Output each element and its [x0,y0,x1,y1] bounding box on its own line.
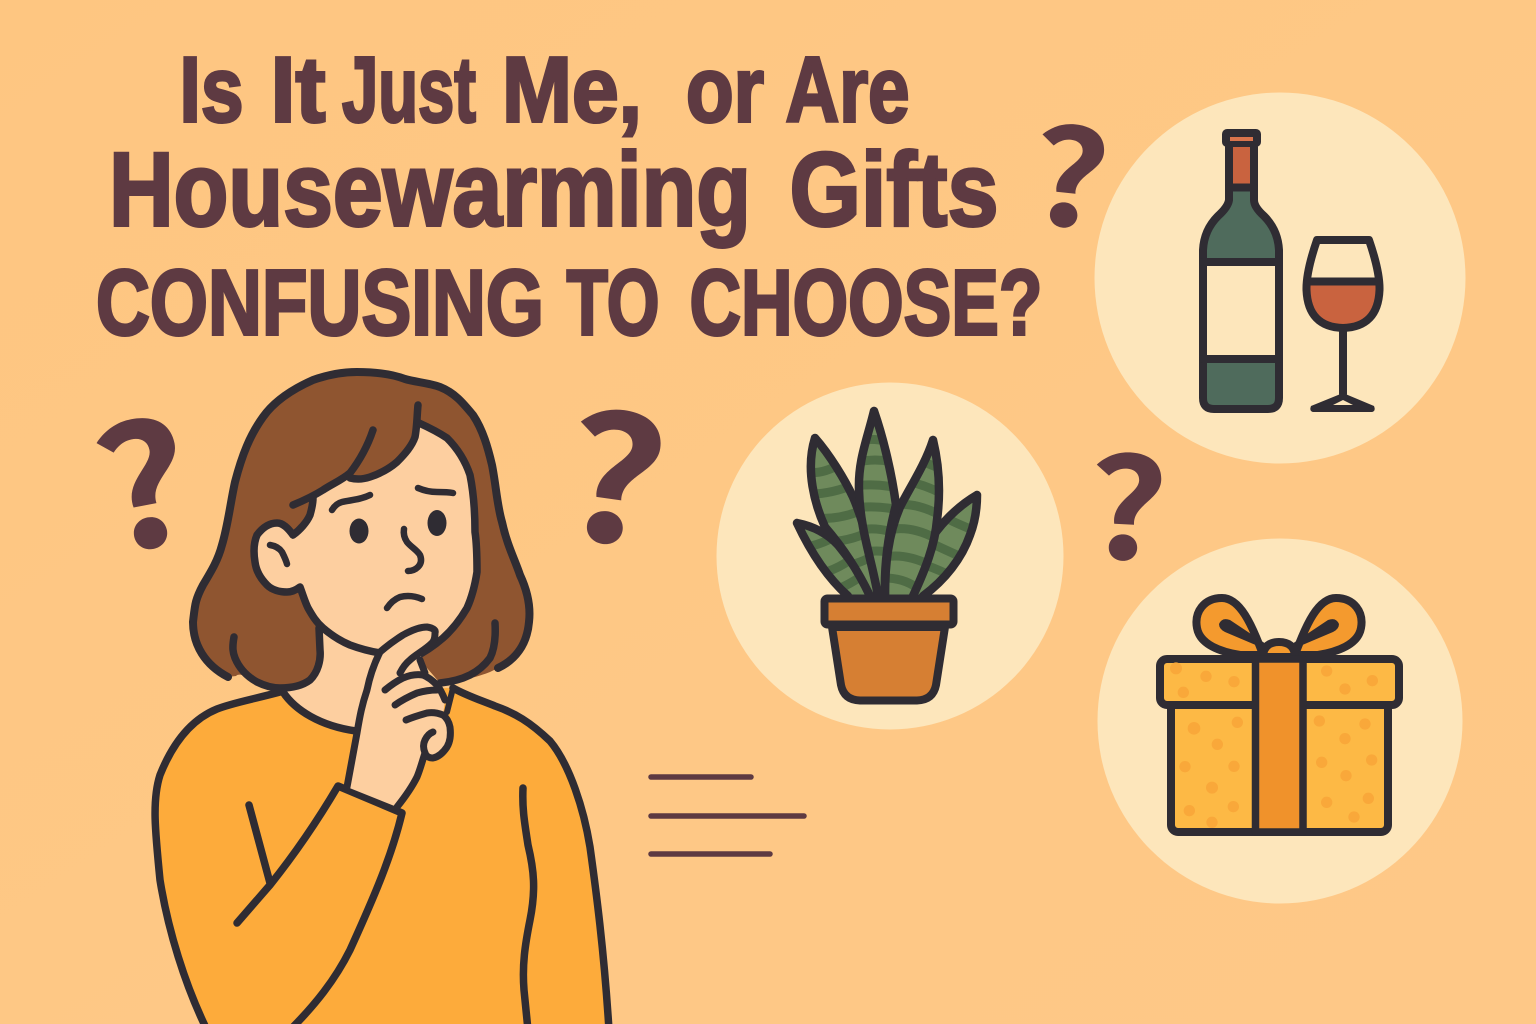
box lid [1160,659,1399,705]
question mark: top right: ? [1022,70,1119,268]
title line 1: It [270,38,326,142]
icon: snake plant [797,411,978,700]
nose [404,529,421,571]
title line 1: Is [180,38,244,142]
title line 3: CHOOSE? [690,250,1042,354]
title [96,38,1042,354]
title line 1: or [686,38,764,142]
bow [1196,598,1362,657]
motion lines [651,777,804,854]
eyebrows [332,488,453,510]
title line 1: Just [342,38,476,142]
question mark: left of person: ? [73,348,211,603]
box body [1171,700,1388,832]
title line 3: CONFUSING [96,250,544,354]
face [254,423,477,658]
ear [254,523,380,653]
title line 3: TO [566,250,660,354]
sweater [155,688,612,1024]
mouth [387,596,422,608]
neck [283,625,385,732]
bangs [293,405,477,658]
panel: plant circle [716,382,1064,730]
hand [347,627,453,807]
eyes [350,510,446,544]
title line 1 [180,38,910,142]
title line 2: Gifts [790,132,998,248]
title line 1: Are [786,38,910,142]
hair outline [193,372,530,688]
collar [283,692,356,731]
icon: wine glass [1306,240,1380,412]
hair [193,372,530,688]
pot [824,598,954,700]
title line 1: Me, [502,38,642,142]
title line 2: Housewarming [109,132,751,248]
question mark: between circles: ? [1083,398,1173,602]
person [155,372,612,1024]
title line 3 [96,250,1042,354]
question mark: right of person: ? [549,338,683,599]
ribbon [1256,659,1303,832]
icon: wine bottle [1203,129,1279,409]
panel: gift circle [1098,538,1462,904]
dots [1170,662,1378,828]
icon: gift box [1160,598,1399,832]
panel: wine circle [1094,92,1466,464]
